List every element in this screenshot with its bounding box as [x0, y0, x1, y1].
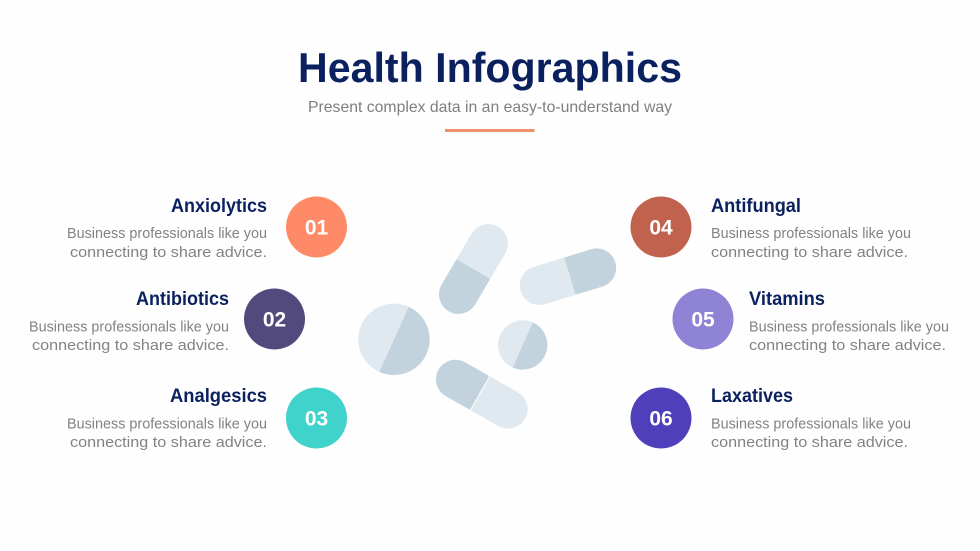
item 05: Vitamins [672, 288, 949, 354]
number badge 05 [672, 288, 734, 350]
number badge 06: 06 [649, 408, 673, 430]
tablet: large [347, 292, 441, 387]
heading: Analgesics: Analgesics [170, 385, 267, 407]
description 05: Business professionals like you [749, 318, 949, 336]
number badge 04 [630, 196, 692, 258]
description 04: Business professionals like you [711, 225, 911, 242]
number badge 03: 03 [305, 408, 328, 430]
pills illustration [347, 217, 621, 436]
item 02: Antibiotics [29, 288, 305, 354]
heading: Antifungal: Antifungal [711, 195, 801, 217]
description 06: Business professionals like you [711, 416, 911, 432]
heading: Anxiolytics: Anxiolytics [171, 195, 267, 217]
number badge 05: 05 [691, 308, 715, 332]
capsule: lower [429, 353, 535, 436]
number badge 02 [244, 288, 305, 350]
heading: Vitamins: Vitamins [749, 288, 825, 310]
description 05 [749, 318, 949, 354]
title: Health Infographics [298, 44, 682, 91]
heading: Antibiotics: Antibiotics [136, 288, 229, 310]
number badge 06 [630, 388, 692, 448]
description 02: connecting to share advice. [32, 337, 229, 354]
item 06: Laxatives [630, 385, 911, 451]
description 01 [67, 225, 267, 261]
accent underline [445, 129, 534, 132]
description 03: connecting to share advice. [70, 434, 267, 451]
item 04: Antifungal [630, 195, 911, 261]
number badge 04: 04 [649, 216, 673, 240]
tablet: small [490, 312, 555, 378]
description 02: Business professionals like you [29, 318, 229, 336]
number badge 01 [286, 196, 347, 258]
description 03 [67, 416, 267, 451]
item 03: Analgesics [67, 385, 347, 451]
description 02 [29, 318, 229, 354]
number badge 03 [286, 388, 347, 448]
number badge 02: 02 [263, 308, 286, 332]
number badge 01: 01 [305, 216, 328, 240]
item 01: Anxiolytics [67, 195, 347, 261]
subtitle: Present complex data in an easy-to-understand way [308, 99, 672, 116]
description 04 [711, 225, 911, 261]
heading: Laxatives: Laxatives [711, 385, 793, 407]
description 06 [711, 416, 911, 451]
description 05: connecting to share advice. [749, 337, 946, 354]
description 06: connecting to share advice. [711, 434, 908, 451]
description 03: Business professionals like you [67, 416, 267, 432]
description 01: Business professionals like you [67, 225, 267, 242]
description 01: connecting to share advice. [70, 244, 267, 261]
capsule: right [515, 244, 621, 310]
capsule: upper [432, 217, 515, 321]
description 04: connecting to share advice. [711, 244, 908, 261]
